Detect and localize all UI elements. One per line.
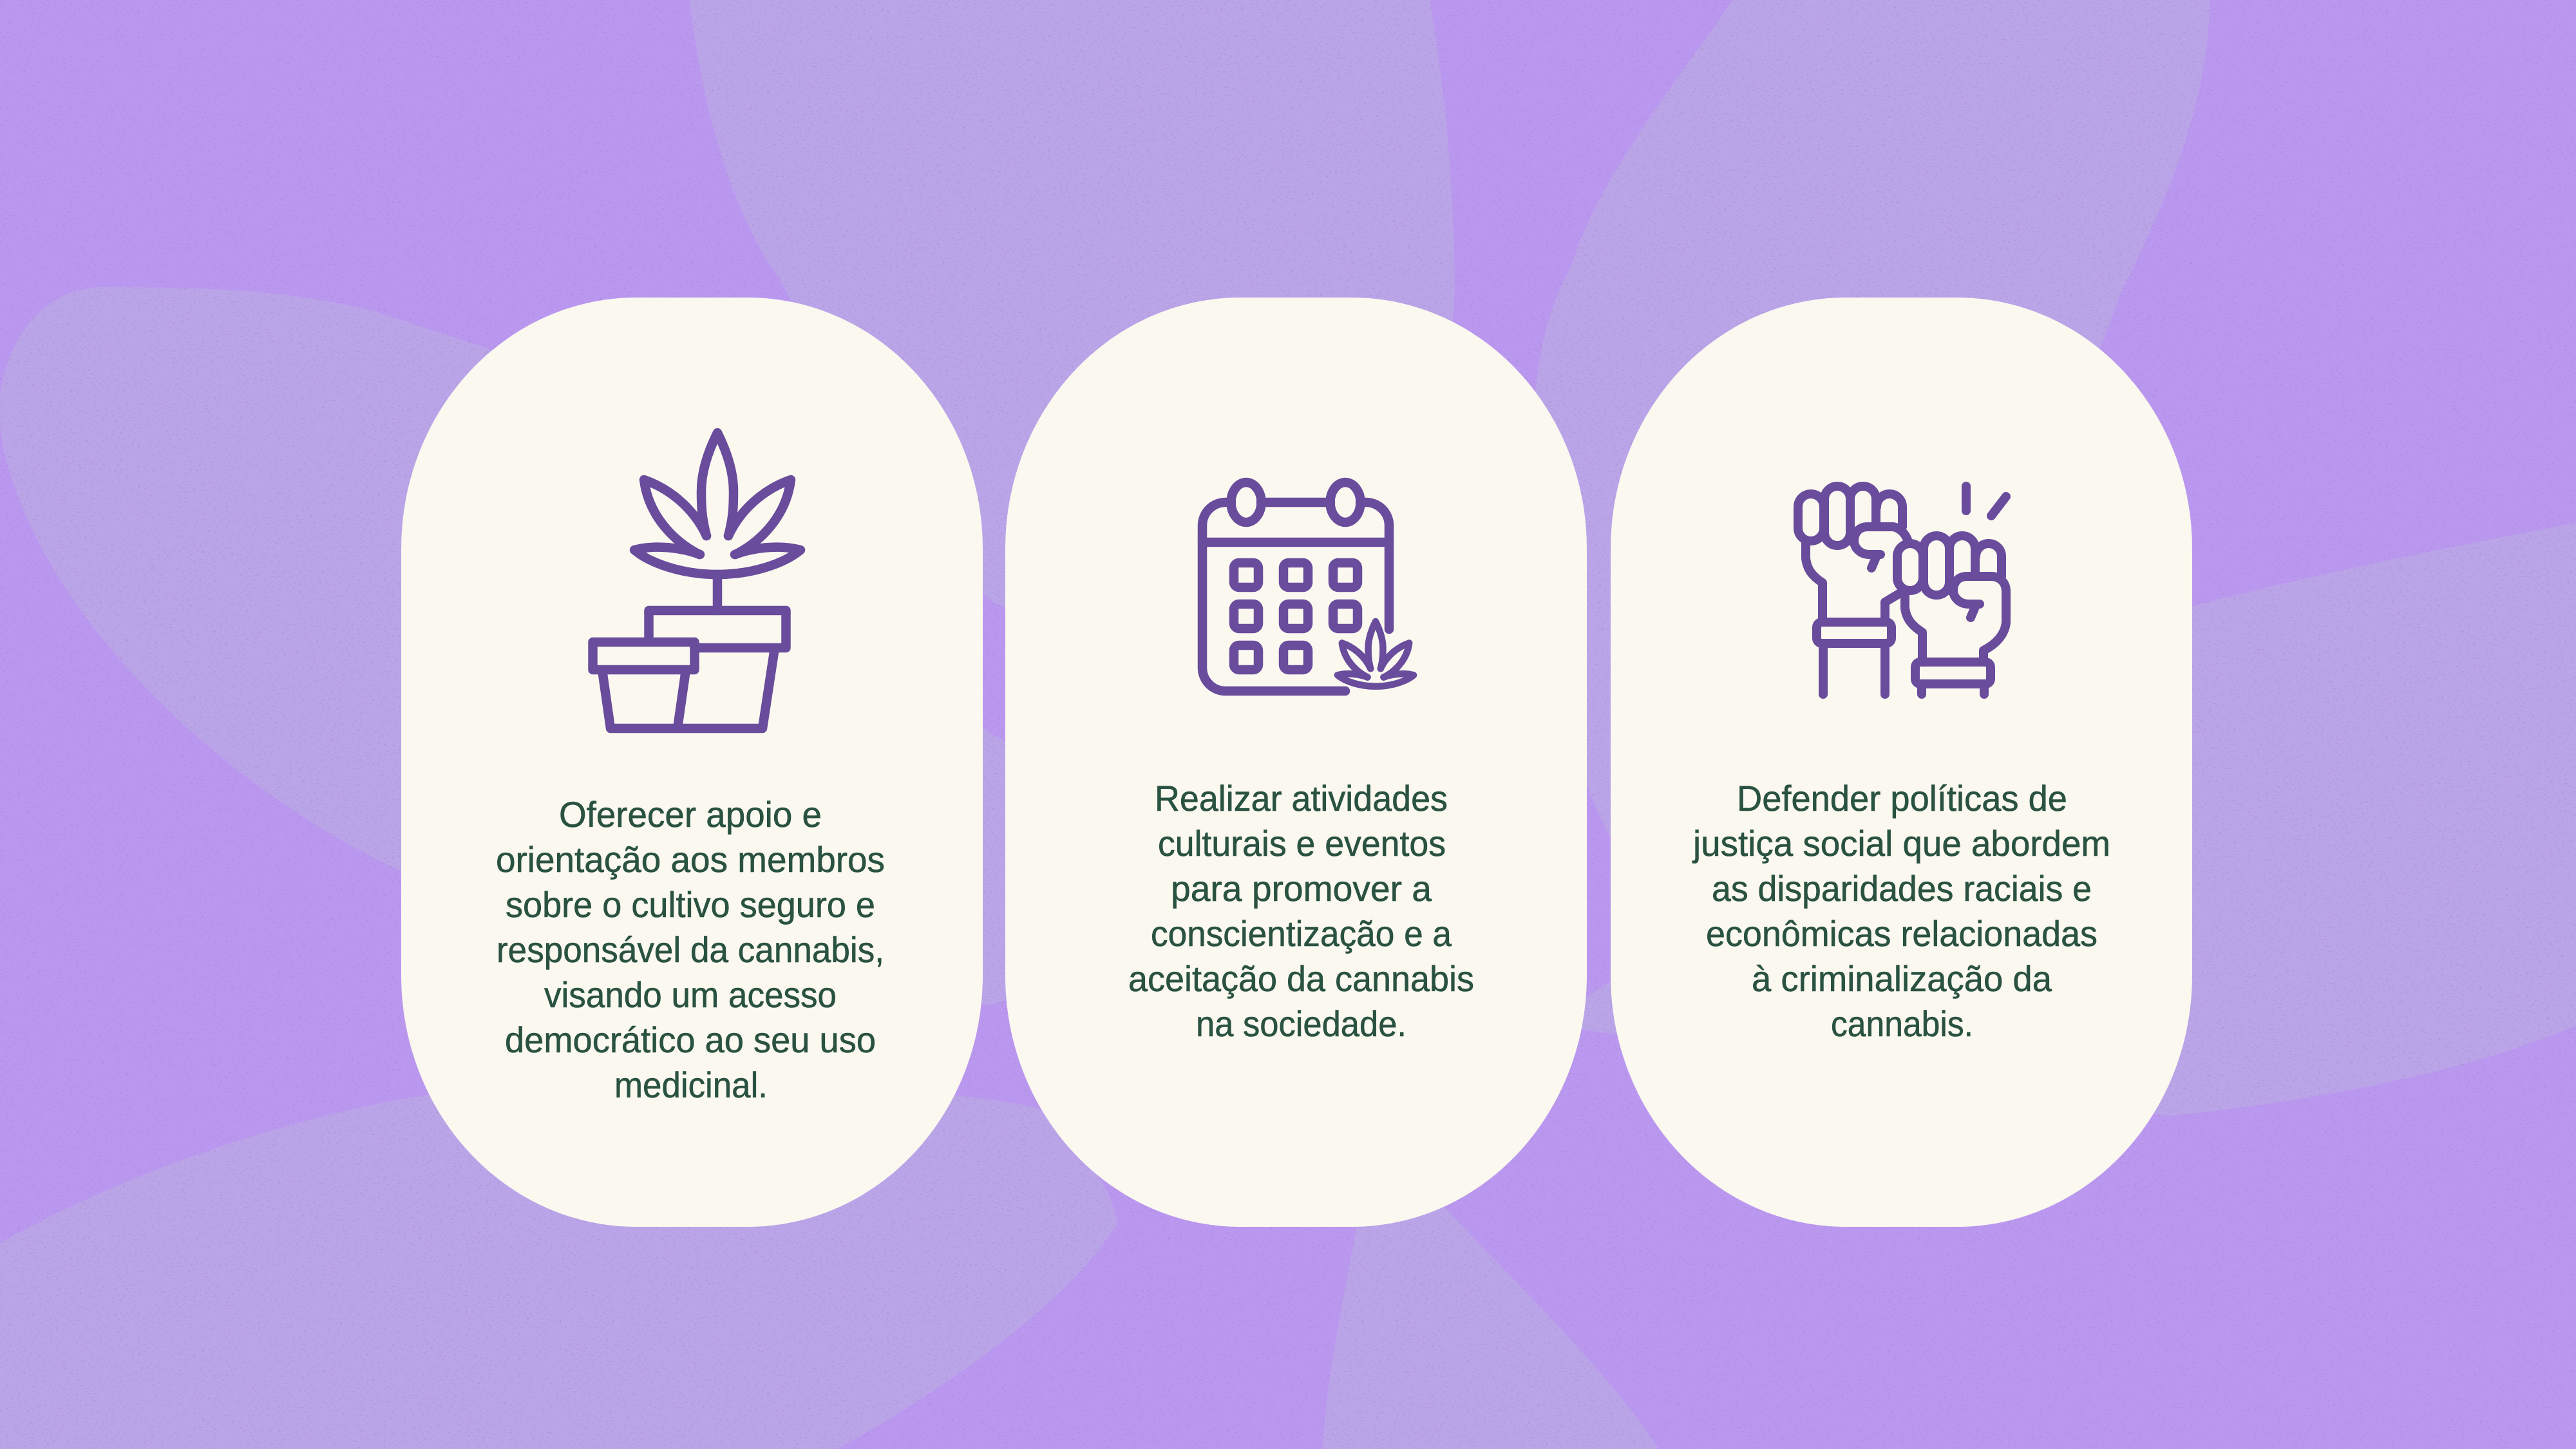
icon: calendar with leaf — [1202, 482, 1414, 691]
text: card 1: responsável da cannabis, — [497, 929, 884, 970]
panel: card 2 cultural events — [1005, 298, 1587, 1227]
text: card 1: Oferecer apoio e — [559, 794, 822, 835]
text: card 1: visando um acesso — [544, 974, 837, 1015]
text: card 3: Defender políticas de — [1737, 778, 2067, 819]
panel: card 3 social justice — [1611, 298, 2192, 1227]
text: card 3 — [1692, 778, 2110, 1044]
text: card 2: Realizar atividades — [1155, 778, 1448, 819]
text: card 2: conscientização e a — [1151, 913, 1452, 954]
text: card 1: democrático ao seu uso — [505, 1019, 876, 1060]
text: card 2 — [1128, 778, 1474, 1044]
text: card 2: culturais e eventos — [1158, 823, 1446, 864]
icon: potted cannabis plant — [592, 433, 800, 728]
text: card 3: econômicas relacionadas — [1706, 913, 2098, 954]
text: card 2: para promover a — [1171, 868, 1432, 909]
text: card 2: na sociedade. — [1196, 1003, 1406, 1044]
text: card 3: as disparidades raciais e — [1712, 868, 2092, 909]
text: card 2: aceitação da cannabis — [1128, 958, 1474, 999]
text: card 1: medicinal. — [614, 1065, 768, 1105]
card 3 background — [1611, 298, 2192, 1227]
card 1 background — [401, 298, 983, 1227]
text: card 1 — [496, 794, 885, 1105]
text: card 3: cannabis. — [1831, 1003, 1973, 1044]
text: card 1: orientação aos membros — [496, 839, 885, 880]
text: card 3: justiça social que abordem — [1692, 823, 2110, 864]
icon: raised fists — [1798, 486, 2006, 694]
panel: card 1 cultivation — [401, 298, 983, 1227]
text: card 1: sobre o cultivo seguro e — [506, 884, 875, 925]
text: card 3: à criminalização da — [1752, 958, 2052, 999]
card 2 background — [1005, 298, 1587, 1227]
